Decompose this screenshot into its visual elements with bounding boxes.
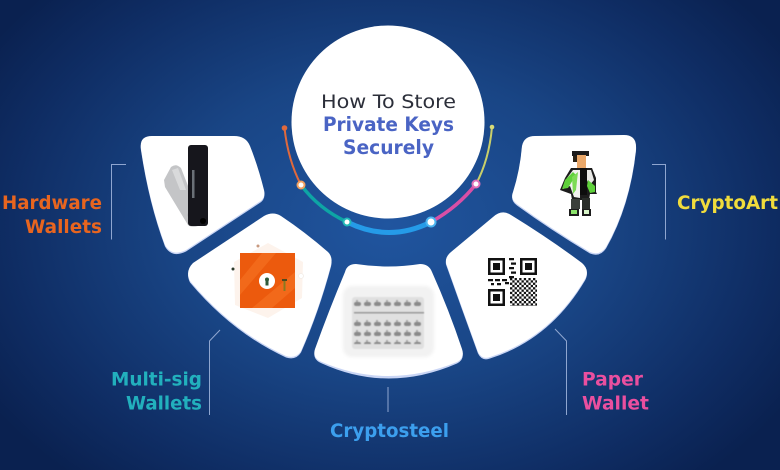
panel: cryptosteel <box>314 264 463 378</box>
central title circle <box>292 26 484 218</box>
label: hardware wallets: Wallets <box>25 216 102 238</box>
label: paper wallet: Paper <box>582 368 644 390</box>
title: Securely <box>343 136 434 159</box>
label: hardware wallets <box>2 192 102 238</box>
title: Private Keys <box>323 113 454 136</box>
panel: hardware wallets <box>141 136 264 254</box>
icon: pixel art figure <box>560 151 597 216</box>
label: paper wallet <box>582 368 649 414</box>
icon: QR code <box>488 258 537 306</box>
icon: cryptosteel plate <box>343 286 434 357</box>
icon: hardware wallet device <box>164 145 208 227</box>
label: multi-sig wallets: Wallets <box>126 392 202 414</box>
multicolour arc <box>282 125 494 232</box>
connector: multi-sig wallets <box>210 330 220 415</box>
title: How To Store <box>321 91 456 113</box>
panel: paper wallet <box>446 212 587 359</box>
panel: cryptoart <box>512 135 636 255</box>
connector: hardware wallets <box>112 164 126 240</box>
label: hardware wallets: Hardware <box>2 192 102 214</box>
title <box>321 91 456 159</box>
label: paper wallet: Wallet <box>582 392 649 414</box>
label: multi-sig wallets <box>111 368 202 414</box>
connector: cryptoart <box>652 164 666 240</box>
connector: paper wallet <box>555 329 566 415</box>
label: multi-sig wallets: Multi-sig <box>111 368 202 390</box>
icon: orange lock box <box>232 243 304 318</box>
connector: cryptosteel <box>387 387 389 412</box>
label: cryptosteel: Cryptosteel <box>330 420 449 442</box>
label: cryptoart: CryptoArt <box>677 192 778 214</box>
panel: multi-sig wallets <box>188 214 332 358</box>
